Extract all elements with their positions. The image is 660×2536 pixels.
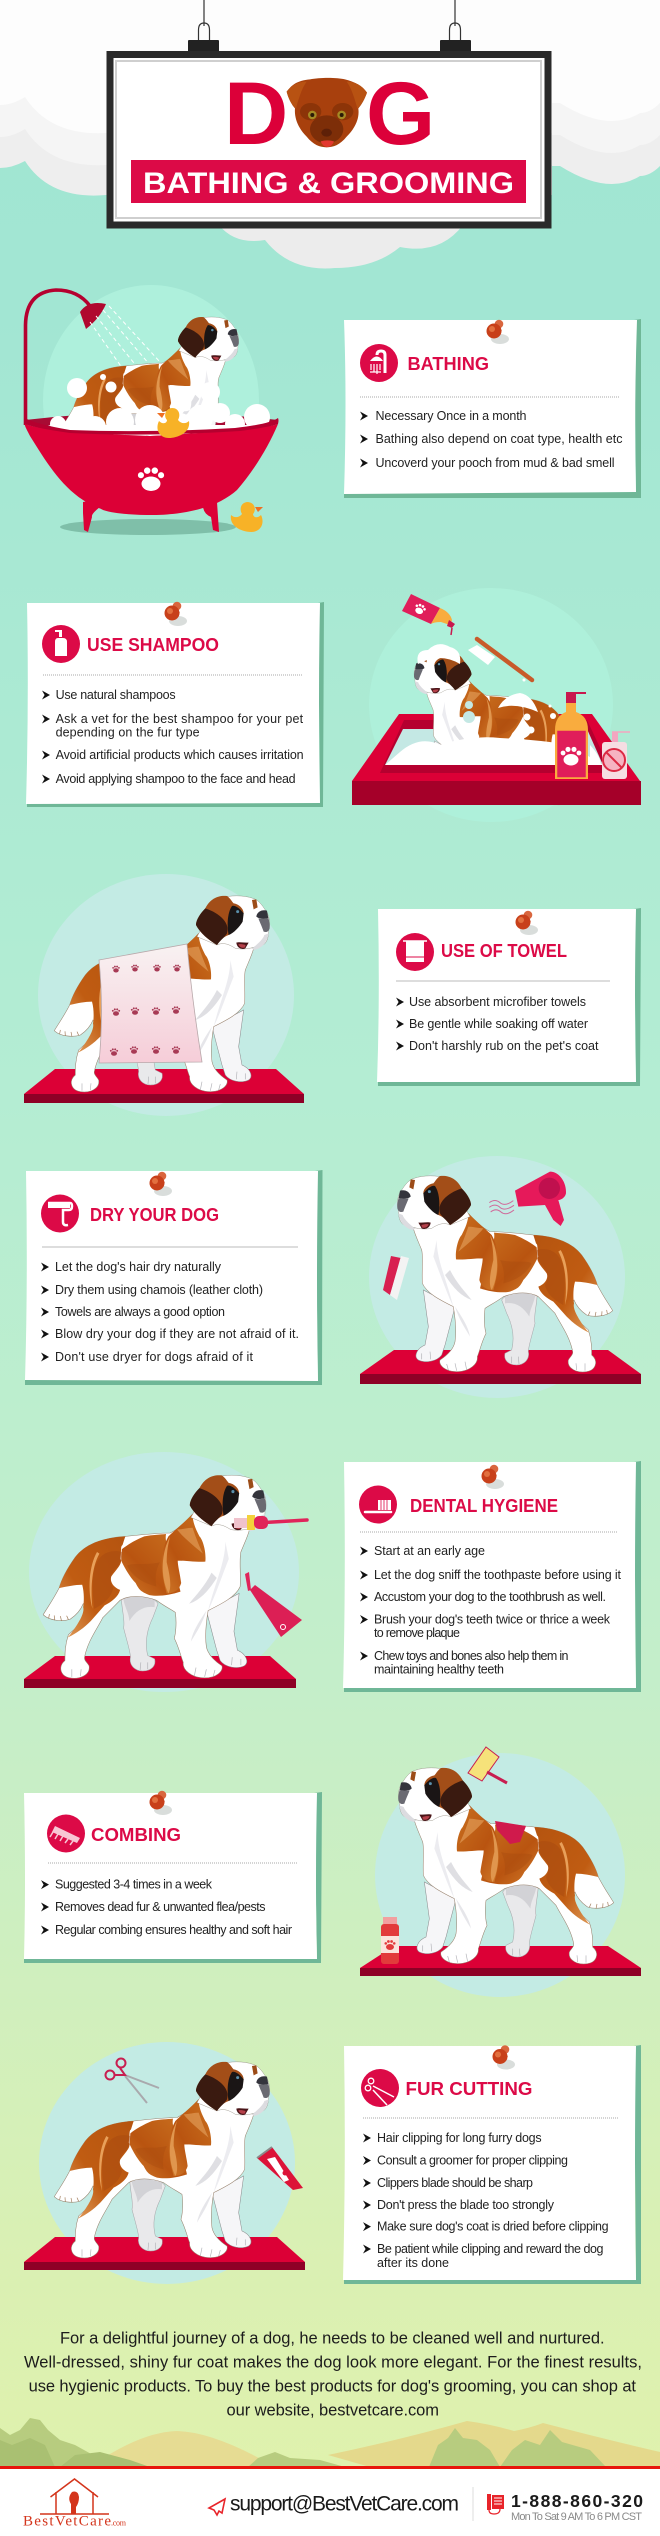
bottle: poured shampoo [402,594,455,635]
list: Towels are always a good option [55,1305,225,1319]
list: Make sure dog's coat is dried before clipping [377,2220,609,2234]
heading: DRY YOUR DOG [90,1205,219,1225]
towel [99,944,202,1063]
panel: bathing [344,319,641,498]
list: maintaining healthy teeth [374,1662,504,1676]
bottle: shampoo [555,692,588,779]
heading: USE SHAMPOO [87,635,219,655]
logo: BestVetCare [23,2514,111,2530]
foam [48,374,270,438]
list: Start at an early age [374,1544,485,1558]
comb on coat [495,1821,526,1844]
hair clipper [257,2147,303,2190]
mat [24,1656,296,1688]
icon: hair dryer [41,1194,79,1232]
dog [397,1176,613,1372]
basin front [380,765,612,773]
heading: USE OF TOWEL [441,941,567,961]
brush [468,639,532,680]
list: depending on the fur type [56,726,200,740]
closing paragraph [24,2330,642,2420]
shower [26,290,160,425]
pin [150,1172,172,1196]
list: Necessary Once in a month [376,409,527,423]
bottle: banned product [602,732,630,779]
logo [23,2479,127,2530]
dog [54,2062,270,2258]
list: Hair clipping for long furry dogs [377,2131,542,2145]
panel: fur cutting [343,2045,641,2284]
icon: scissors [361,2069,399,2107]
shadow [60,519,236,535]
list [42,688,304,786]
list: Don't harshly rub on the pet's coat [409,1039,599,1053]
heading: BATHING [408,354,489,374]
list: Use natural shampoos [56,688,176,702]
closing paragraph: use hygienic products. To buy the best products for dog's grooming, you can shop at [29,2378,636,2396]
icon: toothbrush [359,1486,397,1524]
backdrop [369,1156,625,1398]
title word DOG [224,63,435,163]
icon: shower [360,344,398,382]
pin [516,911,538,935]
list: Ask a vet for the best shampoo for your pet [56,712,304,726]
phone [487,2491,643,2523]
clouds [0,0,660,268]
mat [360,1350,641,1384]
icon: shampoo bottle [42,625,80,663]
list: Consult a groomer for proper clipping [377,2154,568,2168]
dog [54,896,270,1092]
list: Be gentle while soaking off water [409,1017,588,1031]
closing paragraph: For a delightful journey of a dog, he needs to be cleaned well and nurtured. [60,2330,605,2348]
panel: dental hygiene [343,1461,641,1692]
list: Removes dead fur & unwanted flea/pests [55,1900,266,1914]
pin [492,2045,515,2070]
icon: dog face [287,78,367,147]
list: Don't use dryer for dogs afraid of it [55,1350,254,1364]
section illustration: drying dog [360,1156,641,1398]
logo: .com [111,2518,127,2528]
dog [43,1475,266,1678]
tub [25,424,278,515]
heading: FUR CUTTING [406,2079,532,2099]
mat [360,1946,641,1976]
scissors [106,2058,159,2103]
dog [414,652,582,805]
mat [24,2237,305,2270]
section illustration: fur cutting dog [24,2042,305,2284]
product bottle [381,1917,399,1964]
section illustration: combing dog [360,1747,641,1997]
mat [24,1069,304,1103]
closing paragraph: Well-dressed, shiny fur coat makes the dog look more elegant. For the finest results, [24,2354,642,2372]
title band [131,160,526,203]
closing paragraph: our website, bestvetcare.com [226,2402,439,2420]
list: Suggested 3-4 times in a week [55,1878,213,1892]
panel: use shampoo [26,602,324,807]
title sign: BATHING & GROOMING [143,167,514,200]
dog [398,1768,614,1964]
section illustration: bathing tub [24,285,278,535]
list: Use absorbent microfiber towels [409,995,586,1009]
heading: DENTAL HYGIENE [410,1496,558,1516]
list: Bathing also depend on coat type, health etc [376,432,622,446]
list [360,1544,622,1676]
backdrop [369,588,613,822]
section illustration: towel dog [24,874,304,1116]
phone: 1-888-860-320 [511,2491,643,2511]
heading: COMBING [91,1825,181,1845]
icon: comb [47,1814,85,1852]
panel: dry your dog [25,1170,322,1385]
dog [61,317,239,479]
hanging clips [188,0,471,52]
chamois cloth [383,1256,409,1300]
title sign [110,0,548,225]
toothbrush [234,1515,307,1530]
tub feet [83,502,100,532]
title word DOG: G [366,63,435,163]
list: Clippers blade should be sharp [377,2176,533,2190]
email: support@BestVetCare.com [230,2492,459,2516]
hair dryer [489,1172,566,1226]
list: Chew toys and bones also help them in [374,1649,569,1663]
pin [150,1791,172,1815]
backdrop [38,874,294,1116]
sign frame [110,54,548,225]
phone: Mon To Sat 9 AM To 6 PM CST [511,2511,642,2523]
slicker brush [468,1747,507,1783]
list: Uncoverd your pooch from mud & bad smell [376,456,614,470]
list [41,1260,299,1364]
list: after its done [377,2256,449,2270]
section illustration: shampoo basin [352,588,641,822]
foam [385,644,603,772]
list: Dry them using chamois (leather cloth) [55,1283,263,1297]
panel: combing [24,1791,322,1963]
backdrop [375,1753,625,1997]
pin [482,1465,504,1489]
list [41,1878,292,1937]
backdrop [43,285,259,515]
backdrop [39,2042,295,2284]
list: Regular combing ensures healthy and soft hair [55,1923,292,1937]
toothpaste tube [245,1572,302,1637]
pin [486,320,509,344]
footer [0,2466,660,2536]
panel: use of towel [377,908,641,1086]
list: Don't press the blade too strongly [377,2198,555,2212]
section illustration: dental dog [24,1452,307,1692]
backdrop [29,1452,299,1692]
list: Blow dry your dog if they are not afraid of it. [55,1327,299,1341]
list: Let the dog's hair dry naturally [55,1260,222,1274]
list: Be patient while clipping and reward the dog [377,2242,604,2256]
list: Accustom your dog to the toothbrush as well. [374,1590,606,1604]
list: Let the dog sniff the toothpaste before using it [374,1568,622,1582]
landscape hills and bushes [0,2418,660,2467]
list [360,409,622,470]
list: Brush your dog's teeth twice or thrice a week [374,1612,611,1626]
icon: towel [396,933,434,971]
list: to remove plaque [374,1626,460,1640]
list: Avoid artificial products which causes irritation [56,748,304,762]
rubber ducks [157,408,263,532]
title word DOG: D [224,63,288,163]
list [396,995,599,1053]
basin back [352,714,640,781]
list: Avoid applying shampoo to the face and head [56,772,296,786]
pin [164,602,187,626]
list [363,2131,609,2270]
icon: paw on tub [138,467,164,491]
